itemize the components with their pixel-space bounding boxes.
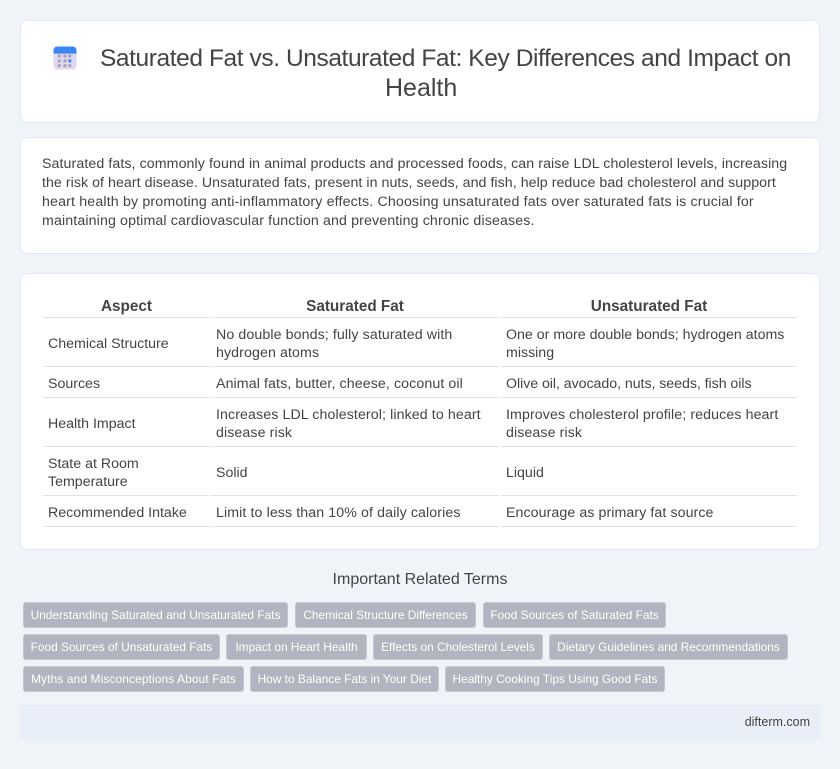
comparison table [43,298,797,527]
tag: Impact on Heart Health [235,640,358,654]
comparison table: One or more double bonds; hydrogen atoms [506,327,784,343]
comparison table: Improves cholesterol profile; reduces heart [506,407,778,423]
icon: calendar [53,46,77,70]
tag [23,666,244,692]
tag: Food Sources of Saturated Fats [490,608,659,622]
tag: Myths and Misconceptions About Fats [31,672,236,686]
row: state at room temperature: State at Room [48,456,139,472]
row: state at room temperature [48,456,139,490]
tag [549,634,788,660]
comparison table: missing [506,345,554,361]
tag [250,666,439,692]
tag: How to Balance Fats in Your Diet [258,672,431,686]
intro text: Saturated fats, commonly found in animal products and processed foods, can raise LDL cholesterol levels, increasing [42,156,787,172]
tag: Chemical Structure Differences [303,608,468,622]
comparison table: Increases LDL cholesterol; linked to heart [216,407,481,423]
table panel [20,273,820,550]
tag [445,666,665,692]
tag: Food Sources of Unsaturated Fats [31,640,212,654]
comparison table: Animal fats, butter, cheese, coconut oil [216,376,463,392]
heading: Saturated Fat vs. Unsaturated Fat: Key Differences and Impact on [100,45,791,72]
row: chemical structure: Chemical Structure [48,336,169,352]
row: state at room temperature: Temperature [48,474,128,490]
tag: Healthy Cooking Tips Using Good Fats [453,672,657,686]
comparison table: Limit to less than 10% of daily calories [216,505,461,521]
tag: Understanding Saturated and Unsaturated Fats [31,608,280,622]
footer bar [20,705,820,739]
intro text: heart health by promoting anti-inflammatory effects. Choosing unsaturated fats over saturated fats is crucial for [42,194,754,210]
table header: Saturated Fat [306,298,404,315]
row: sources: Sources [48,376,100,392]
comparison table: Olive oil, avocado, nuts, seeds, fish oils [506,376,752,392]
row: recommended intake: Recommended Intake [48,505,187,521]
title card [20,20,820,123]
comparison table: hydrogen atoms [216,345,319,361]
comparison table: No double bonds; fully saturated with [216,327,452,343]
related terms heading: Important Related Terms [333,571,507,588]
tag: Dietary Guidelines and Recommendations [557,640,780,654]
comparison table: disease risk [506,425,582,441]
table header: Unsaturated Fat [591,298,707,315]
comparison table: Encourage as primary fat source [506,505,714,521]
intro text: maintaining optimal cardiovascular function and preventing chronic diseases. [42,213,535,229]
heading second line: Health [385,74,457,102]
row: health impact: Health Impact [48,416,136,432]
intro text [42,156,787,229]
tag [373,634,543,660]
table header: Aspect [101,298,152,315]
tag [23,602,288,628]
comparison table: Liquid [506,465,544,481]
footer source text: difterm.com [745,715,810,729]
tag [23,634,220,660]
related term tags [23,602,788,692]
comparison table: Solid [216,465,248,481]
tag: Effects on Cholesterol Levels [381,640,535,654]
tag [226,634,367,660]
tag [483,602,666,628]
comparison table: disease risk [216,425,292,441]
tag [295,602,476,628]
intro panel [20,137,820,254]
intro text: the risk of heart disease. Unsaturated fats, present in nuts, seeds, and fish, help reduce bad cholesterol and support [42,175,776,191]
